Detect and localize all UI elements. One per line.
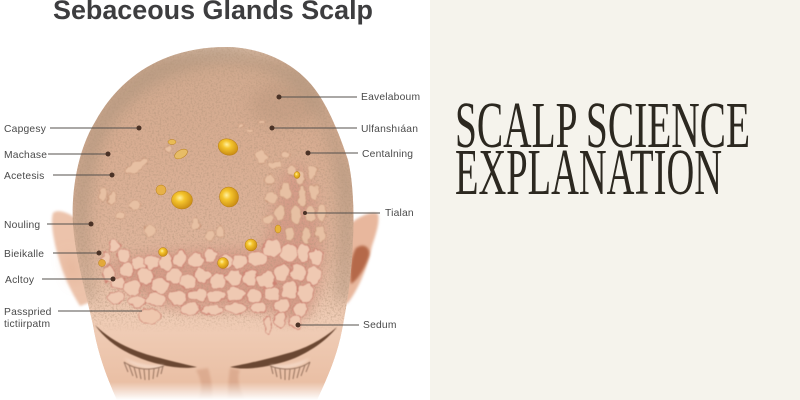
icon: left ear [52,211,96,306]
lower forehead and face [93,320,343,395]
right eyebrow [230,327,337,369]
labels right [270,92,420,331]
darker crown right [254,87,311,126]
bottom fade [90,382,350,400]
oil drop small 4 [245,239,257,251]
label: Sedum: Sedum [363,320,397,331]
stubble rim [73,47,356,300]
scalp base [72,47,354,393]
reddish cell underlay [104,165,322,325]
oil drop small 7 [294,172,300,178]
right eyelashes [270,362,310,380]
oil drop small 9 [98,260,106,266]
nose shade [196,368,245,400]
label: Nouling: Nouling [4,220,40,231]
label: Machase [4,150,110,161]
icon: inner left ear shade [66,252,78,284]
right eyelid [270,358,310,369]
heading: Scalp Science Explanation [455,89,750,209]
oil drop small 6 [158,248,168,256]
icon: inner right ear shade [350,246,369,284]
oil drop large center [217,185,241,209]
head shape [72,47,354,398]
labels left [4,124,142,330]
oil drop small 3 [173,147,189,161]
label: Acltoy [5,275,116,286]
oil drop large top [216,136,240,158]
label: Capgesy: Capgesy [4,124,47,135]
upper flakes right side [99,120,326,242]
label: Tialan: Tialan [385,208,414,219]
icon: right ear [340,213,379,304]
label: Acltoy: Acltoy [5,275,35,286]
oil drop small 8 [275,225,281,233]
label: Passpried ticturpatm: Passpried [4,307,52,318]
label: Sedum [296,320,397,331]
panel: cream title background [430,0,800,400]
oil droplets [98,136,300,268]
label: Centalning: Centalning [362,149,413,160]
label: Acetesis [4,171,114,182]
label: Eavelaboum: Eavelaboum [361,92,420,103]
left eyebrow [95,325,197,368]
label: Tialan [303,208,414,219]
label: Passpried ticturpatm: tictiirpatm [4,319,50,330]
label: Acetesis: Acetesis [4,171,45,182]
label: Bieikalle [4,249,102,260]
flaky skin cells [101,239,322,334]
skin grain [60,40,370,340]
oil drop small 2 [168,140,176,144]
label: Machase: Machase [4,150,47,161]
label: Ulfanshiaan: Ulfanshıáan [361,124,418,135]
label: Eavelaboum [276,92,420,103]
left eyelashes [124,362,164,380]
label: Capgesy [4,124,142,135]
left eyelid [124,358,164,369]
label: Bieikalle: Bieikalle [4,249,44,260]
oil drop small 1 [156,185,166,195]
label: Centalning [306,149,413,160]
label: Ulfanshiaan [270,124,418,135]
oil drop large center left [172,191,192,209]
label: Nouling [4,220,94,231]
oil drop small 5 [218,258,228,268]
label: Passpried ticturpatm [4,307,142,330]
illustration: head and scalp [52,40,379,400]
